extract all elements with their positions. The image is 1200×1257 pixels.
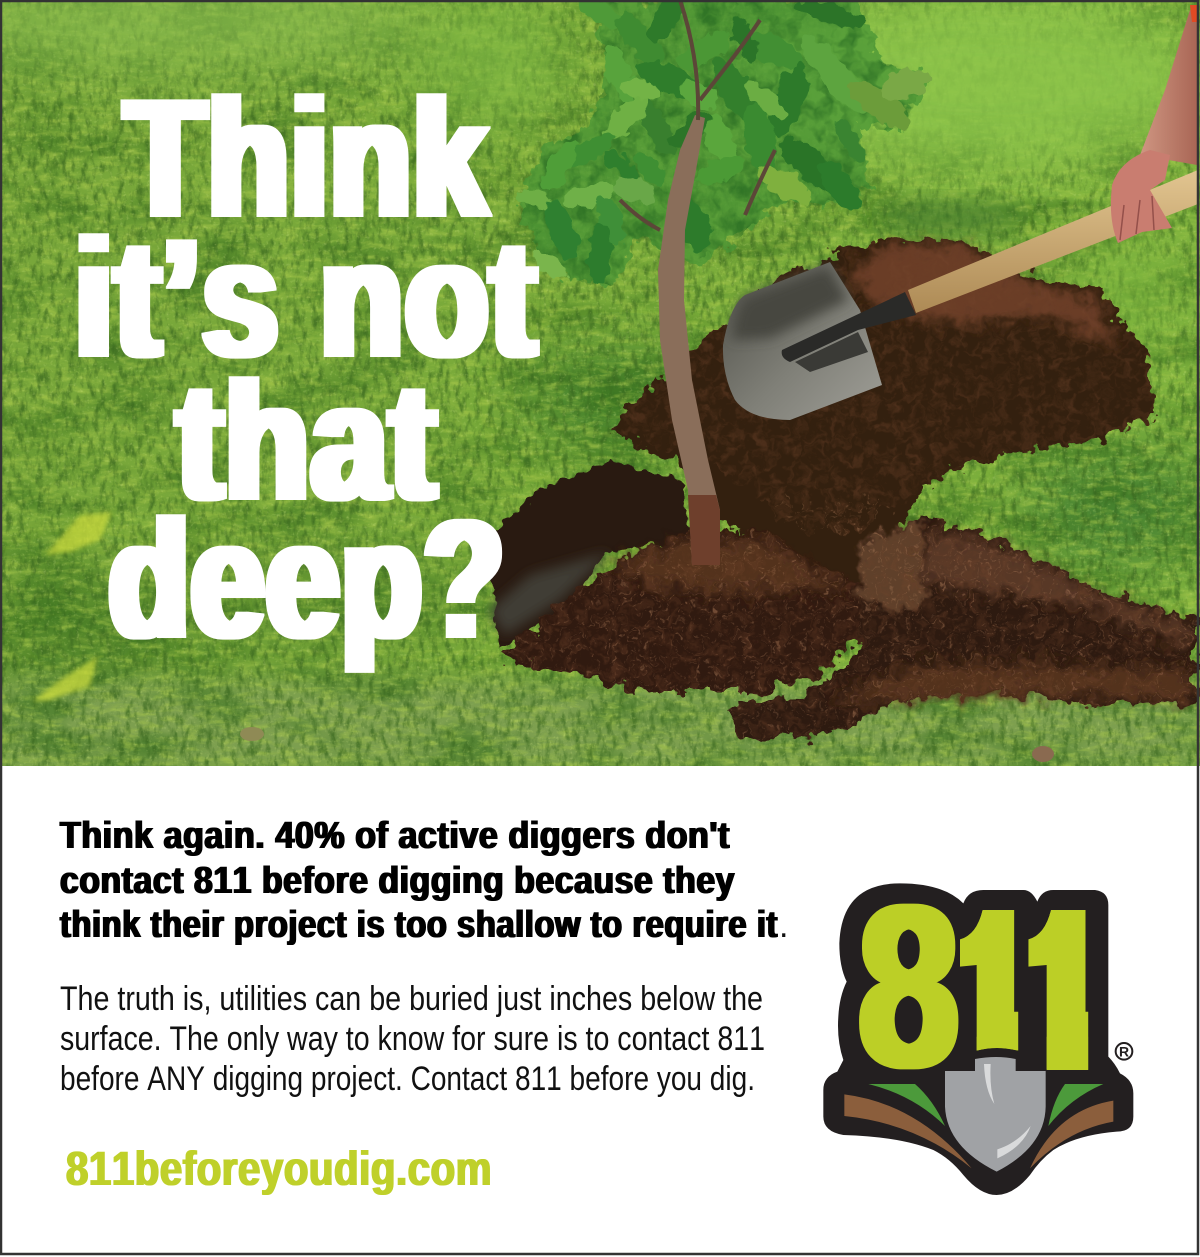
logo shovel blade [945,1057,1046,1172]
soil mounds [480,230,1200,750]
grass background [0,0,1200,770]
website url: 811beforeyoudig.com [66,1143,492,1196]
trench [485,460,690,650]
shovel handle [908,170,1198,313]
headline [75,64,538,673]
bold statement text: Think again. 40% of active diggers don't [60,815,730,857]
registered mark: R [1119,1044,1129,1060]
tree trunk and branches [620,0,775,565]
hand gripping handle [1111,150,1172,243]
logo digit 8: 8 [858,858,959,1115]
811 logo: 1 [1027,807,1095,1135]
headline: Think [125,64,489,252]
811 logo: 1 [955,807,1024,1135]
811 logo [823,883,1134,1195]
body paragraph [60,980,765,1098]
headline: it’s not [75,204,538,392]
registered mark [1116,1043,1132,1060]
photo: planting a tree with a shovel [0,0,1200,770]
body paragraph: surface. The only way to know for sure is to contact 811 [60,1020,765,1058]
logo soil and grass swooshes [844,1084,1113,1168]
bold statement text: contact 811 before digging because they [60,860,735,902]
body paragraph: The truth is, utilities can be buried just inches below the [60,980,763,1018]
tree foliage [510,0,940,290]
bold statement text: . [779,907,788,945]
bold statement text: think their project is too shallow to require it [60,904,778,946]
arm behind handle [1140,5,1197,165]
headline: deep? [109,485,506,673]
water in trench [490,552,610,635]
headline: that [177,347,438,535]
bold statement text [60,815,788,946]
shovel [723,262,916,420]
logo black outline [823,883,1133,1195]
body paragraph: before ANY digging project. Contact 811 before you dig. [60,1060,755,1098]
